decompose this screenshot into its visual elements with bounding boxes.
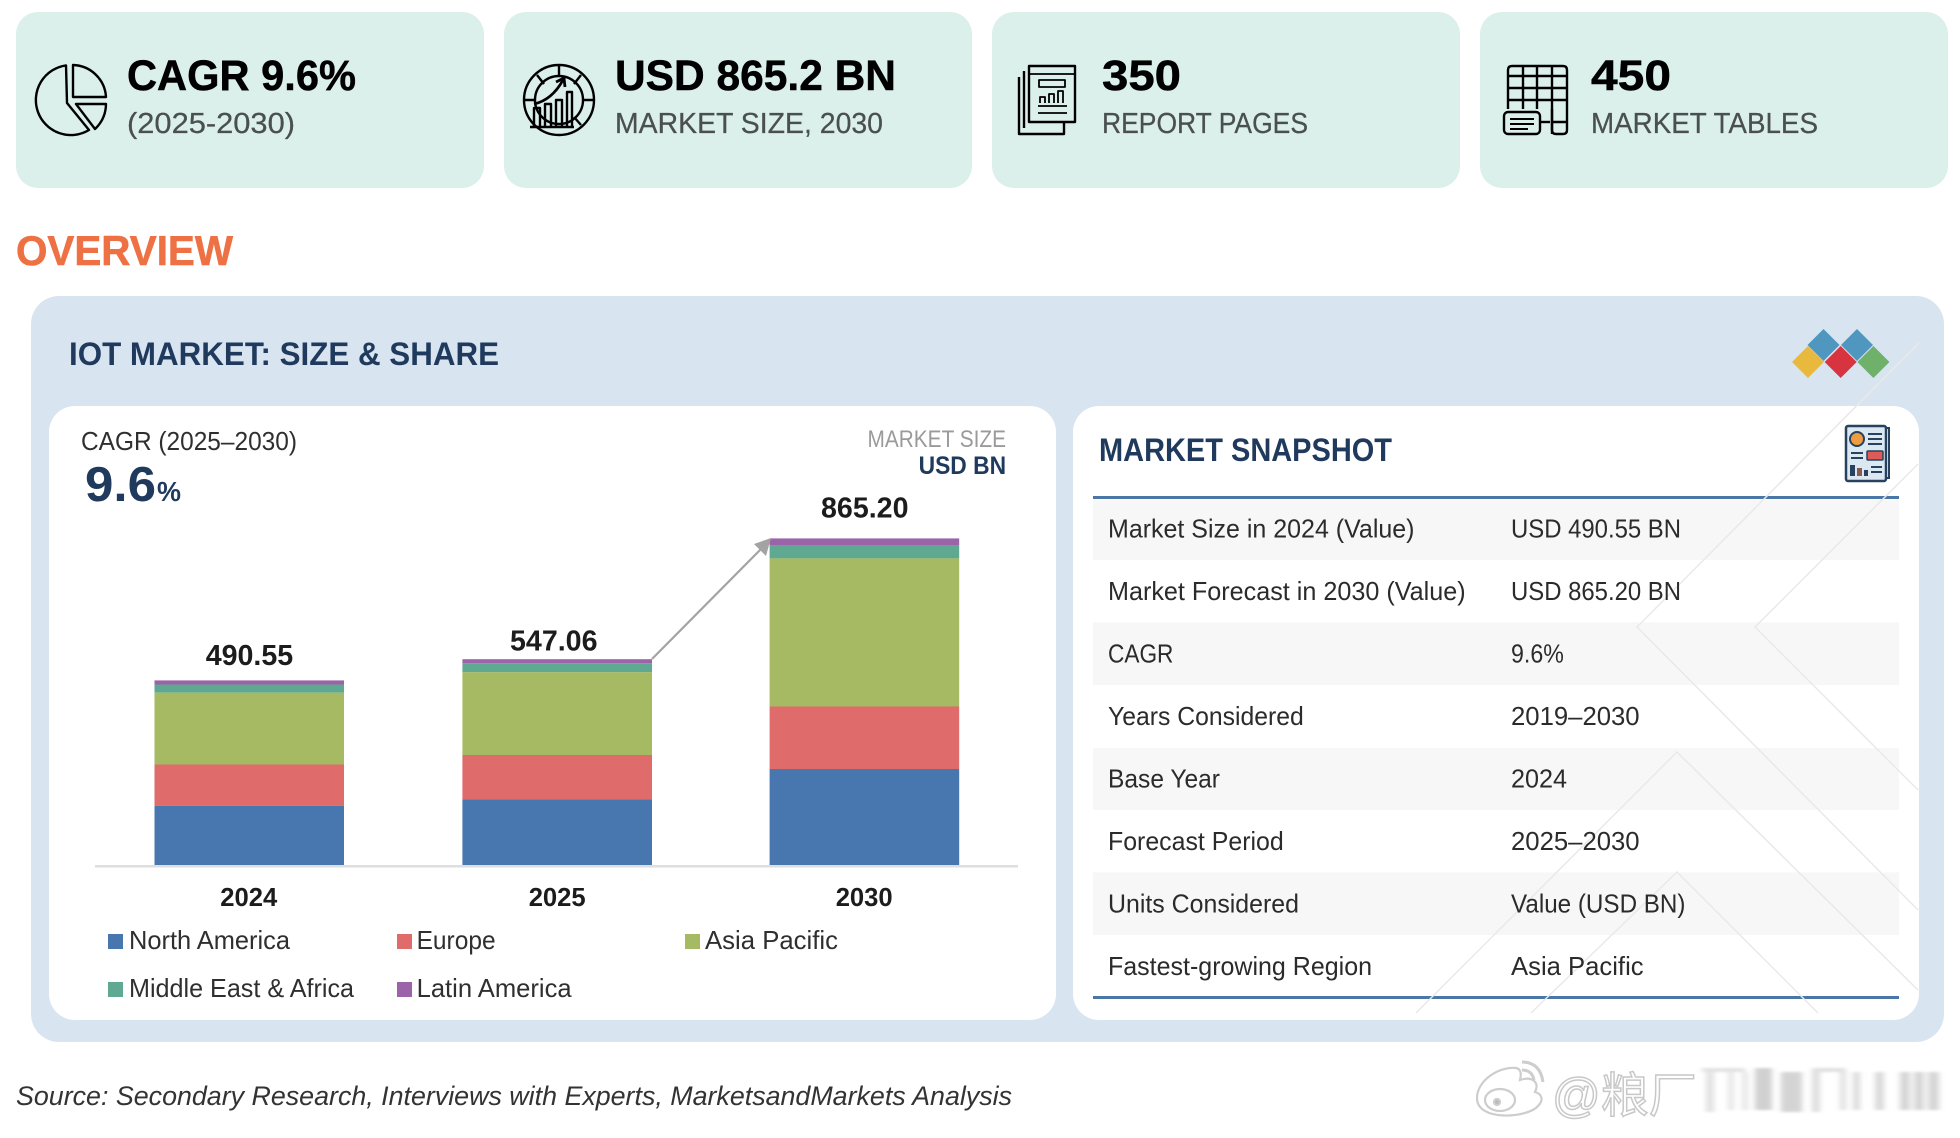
unit label: USD BN bbox=[919, 452, 1006, 480]
snapshot table: 2024 bbox=[1511, 764, 1567, 794]
source note: Source: Secondary Research, Interviews with Experts, MarketsandMarkets Analysis bbox=[16, 1081, 1012, 1111]
x axis years: 2030 bbox=[836, 882, 893, 912]
snapshot table: Forecast Period bbox=[1108, 826, 1284, 856]
icon: report document bbox=[1019, 66, 1075, 134]
heading: overview: OVERVIEW bbox=[16, 227, 233, 274]
stat card: CAGR: (2025-2030) bbox=[127, 108, 295, 140]
snapshot table: USD 865.20 BN bbox=[1511, 576, 1681, 606]
value 2024: 490.55 bbox=[206, 640, 293, 672]
stat card: report pages bbox=[992, 12, 1460, 188]
main panel bbox=[31, 296, 1944, 1042]
snapshot table: Base Year bbox=[1108, 764, 1220, 794]
icon: logo diamonds bbox=[1792, 329, 1889, 378]
icon: snapshot report bbox=[1846, 426, 1889, 481]
stat card: CAGR: CAGR 9.6% bbox=[127, 52, 356, 100]
watermark: @粮厂 bbox=[1552, 1070, 1697, 1123]
stat card: market size: MARKET SIZE, 2030 bbox=[615, 108, 883, 140]
stat card: market tables: MARKET TABLES bbox=[1591, 108, 1818, 140]
chart CAGR label: CAGR (2025–2030) bbox=[81, 426, 297, 456]
x axis years: 2025 bbox=[529, 882, 586, 912]
stat card: market tables: 450 bbox=[1591, 52, 1671, 100]
legend: Middle East & Africa bbox=[129, 973, 355, 1003]
stat card: market tables bbox=[1480, 12, 1948, 188]
icon: weibo logo bbox=[1477, 1062, 1543, 1116]
snapshot table bbox=[1093, 343, 1919, 1013]
x axis years bbox=[220, 882, 893, 912]
value 2030: 865.20 bbox=[821, 493, 908, 525]
snapshot table: Units Considered bbox=[1108, 889, 1299, 919]
legend: Europe bbox=[417, 925, 496, 955]
snapshot table: Years Considered bbox=[1108, 701, 1304, 731]
icon: table grid bbox=[1504, 66, 1567, 134]
snapshot table: Fastest-growing Region bbox=[1108, 951, 1372, 981]
snapshot table: Market Forecast in 2030 (Value) bbox=[1108, 576, 1466, 606]
legend: North America bbox=[129, 925, 291, 955]
snapshot table: 9.6% bbox=[1511, 639, 1564, 669]
chart CAGR value: 9.6 bbox=[85, 458, 156, 512]
blurred watermark remainder bbox=[1702, 1068, 1939, 1112]
legend: Asia Pacific bbox=[705, 925, 838, 955]
arrow: growth bbox=[652, 538, 771, 659]
watermark bbox=[1477, 1062, 1939, 1123]
market size unit label: MARKET SIZE bbox=[868, 426, 1006, 453]
snapshot heading: MARKET SNAPSHOT bbox=[1099, 432, 1392, 468]
legend bbox=[108, 925, 838, 1003]
icon: pie chart bbox=[36, 65, 106, 135]
snapshot table: USD 490.55 BN bbox=[1511, 514, 1681, 544]
x axis years: 2024 bbox=[220, 882, 278, 912]
stat card: market size bbox=[504, 12, 972, 188]
snapshot table: CAGR bbox=[1108, 639, 1173, 669]
stat card: market size: USD 865.2 BN bbox=[615, 52, 896, 100]
legend: Latin America bbox=[417, 973, 572, 1003]
bar 2024 bbox=[154, 680, 344, 865]
snapshot table: 2019–2030 bbox=[1511, 701, 1640, 731]
panel: market snapshot bbox=[1073, 343, 1919, 1020]
snapshot table: Value (USD BN) bbox=[1511, 889, 1686, 919]
chart CAGR percent sign: % bbox=[157, 476, 181, 507]
bar 2025 bbox=[462, 659, 652, 865]
stat card: CAGR bbox=[16, 12, 484, 188]
value 2025: 547.06 bbox=[510, 626, 598, 658]
stat card: report pages: REPORT PAGES bbox=[1102, 108, 1308, 140]
panel: bar chart bbox=[49, 406, 1056, 1020]
snapshot table: 2025–2030 bbox=[1511, 826, 1640, 856]
icon: growth dial bbox=[524, 65, 594, 135]
snapshot table: Asia Pacific bbox=[1511, 951, 1644, 981]
stat card: report pages: 350 bbox=[1102, 52, 1181, 100]
bar 2030 bbox=[770, 538, 959, 865]
panel heading: IOT MARKET: SIZE & SHARE bbox=[69, 336, 499, 372]
snapshot table: Market Size in 2024 (Value) bbox=[1108, 514, 1414, 544]
